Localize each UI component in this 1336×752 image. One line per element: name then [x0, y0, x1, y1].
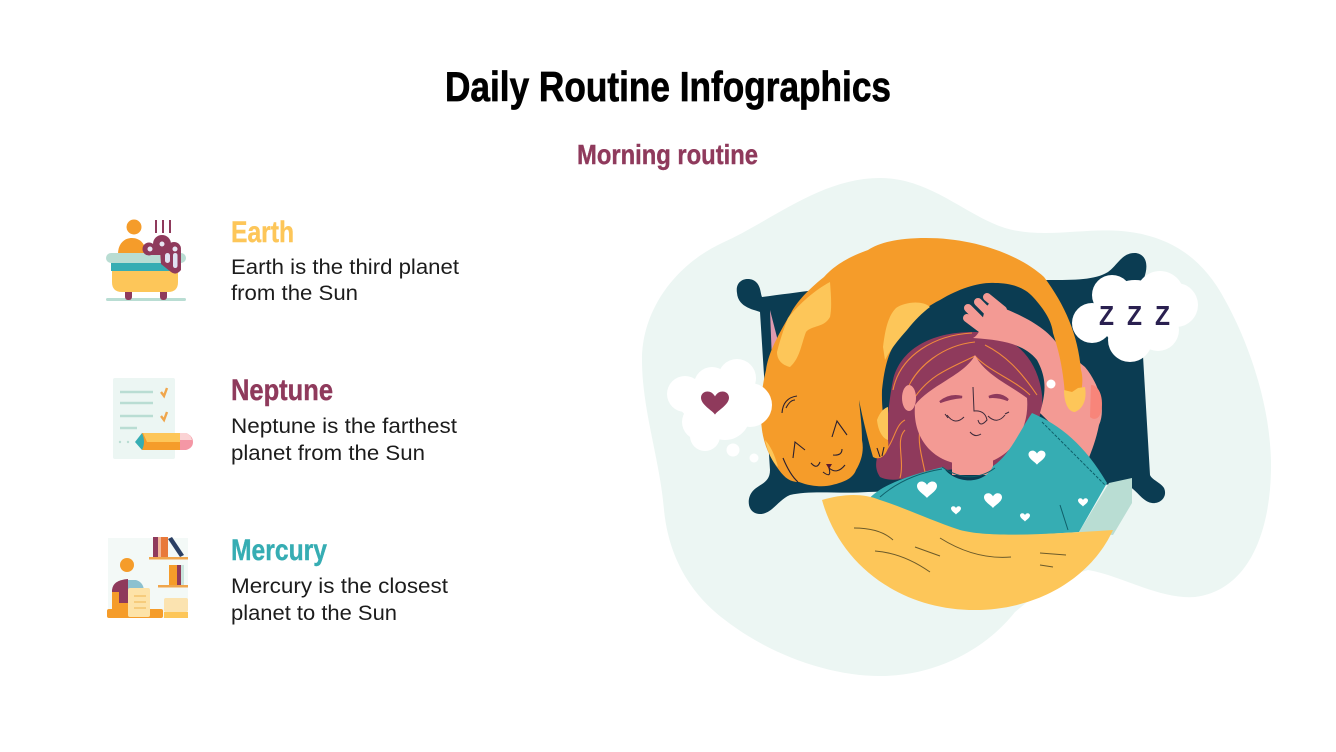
neck: [952, 445, 993, 475]
icon: heart: [701, 392, 729, 415]
text: Earth description: from the Sun: [231, 281, 358, 305]
face: [915, 355, 1027, 465]
label: Mercury: Mercury: [231, 534, 327, 567]
cat tail: [770, 310, 779, 362]
label: Earth: Earth: [231, 216, 294, 249]
bed sheet: [1079, 478, 1132, 535]
icon: person studying with bookshelf: [107, 537, 188, 618]
text: Mercury description: Mercury is the closest: [231, 574, 448, 598]
arm and hand: [967, 297, 1102, 460]
thought cloud: Z Z Z: [1072, 271, 1198, 362]
text: Neptune description: planet from the Sun: [231, 441, 425, 465]
icon: bathtub: [106, 220, 186, 301]
cat markings: [765, 282, 1086, 467]
pyjama shirt: [868, 413, 1107, 540]
blanket: [822, 495, 1113, 610]
hair strands: [885, 333, 1037, 478]
thought cloud: Z Z Z: Z: [1155, 300, 1170, 331]
hair: [876, 332, 1042, 480]
text: Earth description: Earth is the third planet: [231, 255, 459, 279]
illustration: sleeping girl with cat: [642, 178, 1271, 676]
label: Neptune: Neptune: [231, 374, 333, 407]
cat: [761, 238, 1086, 486]
text: Mercury description: planet to the Sun: [231, 601, 397, 625]
text: Neptune description: Neptune is the farthest: [231, 414, 457, 438]
subtitle: Morning routine: [577, 139, 758, 170]
small bubble: [1046, 380, 1056, 388]
thought cloud: heart: [667, 359, 772, 462]
face details: [940, 387, 1009, 436]
thought cloud: Z Z Z: Z: [1099, 300, 1114, 331]
item: Mercury: [107, 534, 448, 625]
ear: [902, 385, 916, 411]
background blob: [642, 178, 1271, 676]
item: Earth: [106, 216, 459, 305]
title: Daily Routine Infographics: [445, 63, 891, 110]
item: Neptune: [113, 374, 457, 465]
pillow: [737, 253, 1165, 514]
thought cloud: Z Z Z: Z: [1127, 300, 1142, 331]
icon: checklist and pencil: [113, 378, 193, 459]
cat face: [782, 396, 884, 482]
